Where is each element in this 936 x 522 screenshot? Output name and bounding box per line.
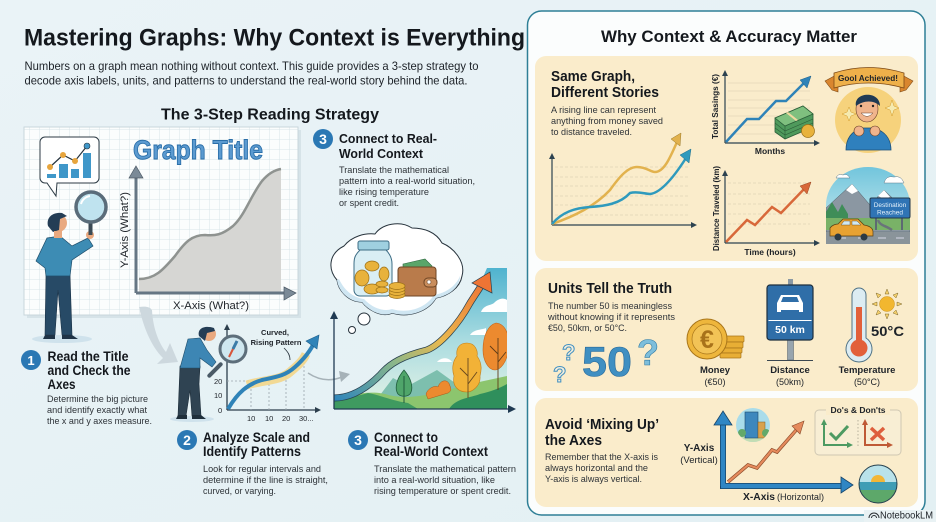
step 3 bottom: rising temperature or spent credit. (374, 486, 511, 497)
card: avoid mixing up the axes (535, 398, 918, 507)
step 3 bottom: Real-World Context (374, 444, 488, 459)
icon: euro coin: € (700, 326, 714, 354)
icon: road sign 50 km (767, 279, 813, 387)
step 2: Look for regular intervals and (203, 464, 321, 475)
icon: goal achieved person (825, 68, 913, 153)
step 3 top: Translate the mathematical (339, 165, 449, 176)
step 3 bottom: into a real-world situation, like (374, 475, 495, 486)
arrow: step 1 to step 2 (139, 307, 178, 364)
card: avoid mixing up the axes: Remember that the X-axis is (545, 452, 658, 463)
do's and don'ts box: Do's & Don'ts (830, 405, 886, 415)
line chart: X-Axis (What?) (173, 300, 249, 312)
title: Mastering Graphs: Why Context is Everything (24, 24, 525, 52)
icon: person analyzing (170, 327, 246, 422)
step 3 top: pattern into a real-world situation, (339, 176, 475, 187)
car (830, 219, 873, 240)
road sign: Reached (877, 210, 903, 216)
icon: road sign 50 km: (50km) (776, 377, 804, 387)
chart: scale and pattern: 20 (214, 377, 222, 386)
card: same graph different stories: Same Graph, (551, 69, 635, 85)
card: units tell the truth (535, 268, 918, 391)
card: same graph different stories: anything from money saved (551, 116, 663, 127)
icon: wallet (398, 259, 437, 296)
chart: scale and pattern: Rising Pattern (251, 338, 302, 347)
road sign (870, 198, 910, 218)
step 1: and Check the (48, 363, 131, 378)
icon: euro coin: (€50) (704, 377, 726, 387)
step 2: 2 (183, 432, 191, 448)
step 1: the x and y axes measure. (47, 416, 152, 427)
chart: axes diagram (680, 411, 853, 503)
icon: buildings (736, 408, 770, 442)
step 3 top: 3 (319, 131, 327, 147)
big number 50: ? (637, 332, 659, 373)
card: units tell the truth: €50, 50km, or 50°C. (548, 323, 627, 334)
step 2: Analyze Scale and (203, 430, 310, 445)
chart: scale and pattern: Curved, (261, 328, 289, 337)
icon: don't (862, 419, 893, 448)
panel heading: Why Context & Accuracy Matter (601, 27, 857, 46)
step 3 top: like rising temperature (339, 187, 429, 198)
step 3 bottom: Translate the mathematical pattern (374, 464, 516, 475)
chart: total savings (710, 70, 820, 156)
card: avoid mixing up the axes: the Axes (545, 433, 602, 449)
icon: destination reached scene (826, 165, 910, 245)
step 1: Axes (48, 377, 76, 392)
step 3 top: World Context (339, 146, 424, 161)
card: same graph different stories: A rising line can represent (551, 105, 656, 116)
icon: sunset landscape (859, 465, 897, 503)
icon: thermometer and sun: (50°C) (854, 377, 880, 387)
chart: scale and pattern: 30... (299, 414, 314, 423)
card: units tell the truth: without knowing if it represents (547, 312, 675, 323)
step 2 (177, 430, 328, 497)
intro text: decode axis labels, units, and patterns to understand the real-world story behind the data. (24, 74, 468, 88)
big number 50: ? (562, 340, 575, 365)
chart: scale and pattern: 20 (282, 414, 290, 423)
big number 50: 50 (582, 338, 632, 385)
landscape with rising arrow (330, 268, 516, 413)
card: units tell the truth: Units Tell the Truth (548, 281, 672, 297)
big number 50: ? (553, 362, 566, 387)
icon: goal achieved person: Gool Achieved! (838, 73, 898, 83)
step 1: Determine the big picture (47, 394, 148, 405)
card: avoid mixing up the axes: always horizontal and the (545, 463, 648, 474)
chart: distance traveled: Time (hours) (744, 247, 796, 257)
panel: graph paper illustration (24, 127, 301, 318)
chart: scale and pattern: 10 (247, 414, 255, 423)
card: units tell the truth: The number 50 is meaningless (548, 301, 672, 312)
step 1 (21, 349, 152, 427)
step 3 top: Connect to Real- (339, 131, 437, 146)
intro text: Numbers on a graph mean nothing without context. This guide provides a 3-step strategy to (24, 59, 479, 73)
thought bubble: savings (331, 224, 463, 334)
chart: axes diagram: Y-Axis (684, 443, 715, 454)
step 1: Read the Title (48, 349, 129, 364)
step 3 top (313, 129, 475, 209)
trees (396, 323, 508, 403)
card: same graph different stories: to distance traveled. (551, 127, 632, 138)
arrow: step 2 to step 3 (308, 371, 350, 382)
step 3 bottom: 3 (354, 432, 362, 448)
icon: euro coin (687, 319, 744, 387)
intro text (24, 59, 479, 88)
icon: thermometer and sun (839, 288, 904, 387)
icon: thermometer and sun: Temperature (839, 365, 895, 376)
line chart (119, 166, 296, 312)
step 3 bottom (348, 430, 516, 497)
step 2: Identify Patterns (203, 444, 301, 459)
icon: road sign 50 km: 50 km (775, 324, 805, 336)
card: same graph different stories (535, 56, 918, 261)
line chart: Y-Axis (What?) (119, 192, 131, 268)
graph title: Graph Title (133, 135, 263, 165)
icon: jar of coins (354, 241, 392, 296)
step 1: 1 (27, 353, 35, 368)
icon: do (821, 419, 853, 448)
road sign: Destination (874, 202, 907, 209)
icon: coin stack (389, 282, 405, 298)
icon: thermometer and sun: 50°C (871, 323, 904, 339)
watermark: NotebookLM: NotebookLM (880, 510, 933, 522)
big number 50 (553, 332, 659, 387)
chart: axes diagram: X-Axis (743, 492, 775, 503)
panel: why context and accuracy matter (528, 11, 925, 515)
chart: scale and pattern: 10 (214, 391, 222, 400)
chart: distance traveled (711, 166, 820, 257)
step 3 top: or spent credit. (339, 198, 399, 209)
do's and don'ts box (815, 405, 901, 455)
chart: axes diagram: (Horizontal) (777, 492, 824, 503)
icon: road sign 50 km: Distance (770, 365, 810, 376)
chart: scale and pattern (214, 324, 321, 423)
strategy heading: The 3-Step Reading Strategy (161, 106, 379, 124)
step 2: determine if the line is straight, (203, 475, 328, 486)
chart: axes diagram: (Vertical) (680, 455, 718, 466)
step 2: curved, or varying. (203, 486, 276, 497)
card: avoid mixing up the axes: Y-axis is always vertical. (545, 474, 642, 485)
card: avoid mixing up the axes: Avoid ‘Mixing Up’ (545, 417, 659, 433)
card: same graph different stories: Different Stories (551, 85, 659, 101)
icon: euro coin: Money (700, 365, 731, 376)
chart: scale and pattern: 0 (218, 406, 222, 415)
step 3 bottom: Connect to (374, 430, 438, 445)
chart: two rising lines (549, 133, 697, 228)
icon: cash stack (775, 106, 814, 139)
chart: distance traveled: Distance Traveled (km) (711, 166, 721, 251)
step 1: and identify exactly what (47, 405, 147, 416)
chart: scale and pattern: 10 (265, 414, 273, 423)
icon: person with magnifier (32, 192, 106, 343)
chart: total savings: Total Sasings (€) (710, 74, 720, 139)
chart: total savings: Months (755, 146, 785, 156)
speech bubble with chart icon (40, 137, 99, 196)
